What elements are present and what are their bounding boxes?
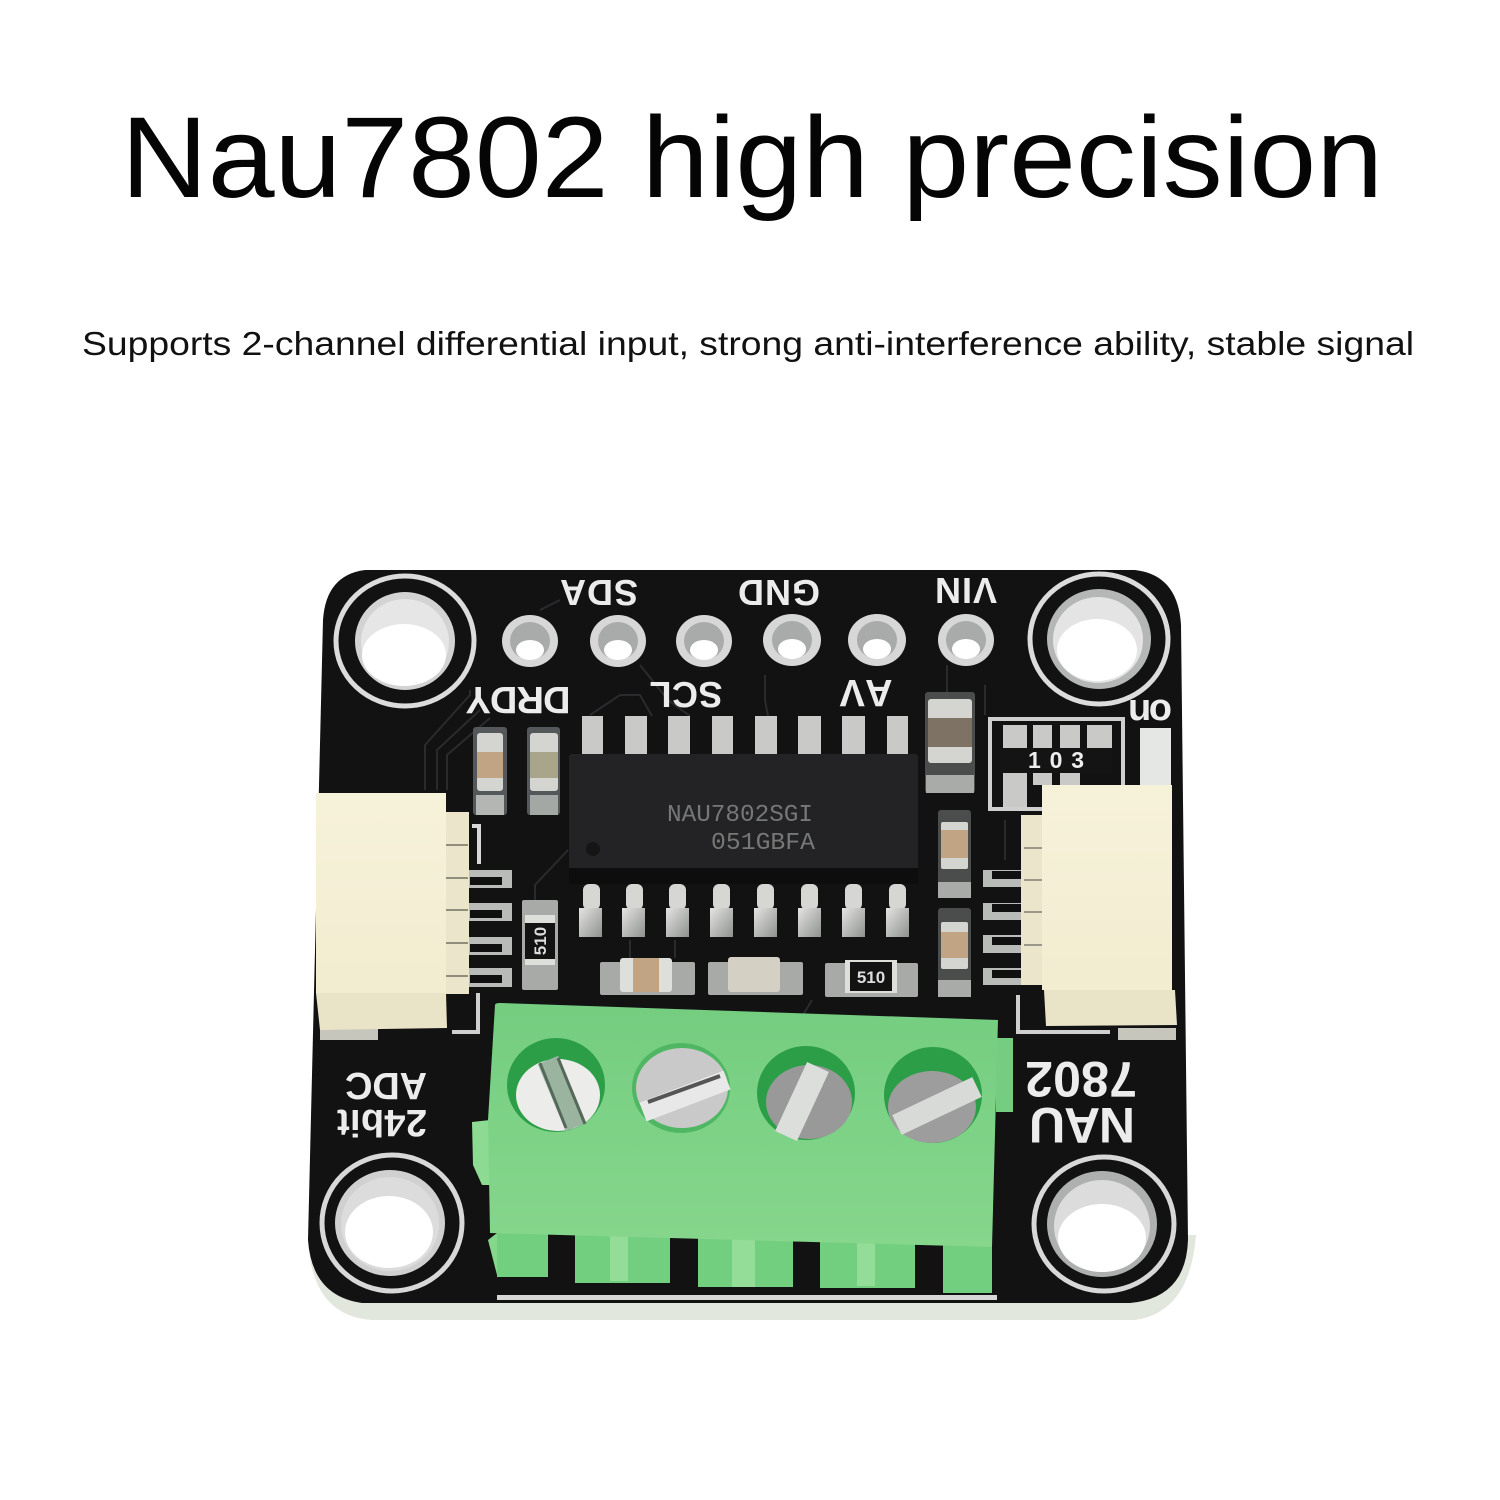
chip pins <box>579 716 909 937</box>
silkscreen labels: SDA <box>560 572 638 613</box>
left connector <box>316 793 512 1040</box>
screw 1 <box>507 1038 605 1132</box>
capacitor pair: left <box>473 727 560 815</box>
resistor array 103 <box>990 719 1123 809</box>
board edge <box>308 1235 1196 1320</box>
silkscreen labels: AV <box>839 671 892 713</box>
terminal feet <box>497 1225 992 1293</box>
silkscreen labels: ADC <box>345 1064 427 1106</box>
title: Nau7802 high precision <box>121 94 1383 222</box>
silkscreen labels: DRDY <box>466 678 570 720</box>
circuit board module <box>308 570 1196 1320</box>
capacitors: right <box>938 810 971 997</box>
capacitors: bottom <box>600 957 803 995</box>
mounting hole: top right <box>1030 574 1168 704</box>
silkscreen labels: VIN <box>935 570 997 611</box>
mounting hole: bottom left <box>322 1155 462 1291</box>
silkscreen labels: GND <box>738 572 820 613</box>
NAU7802 chip: NAU7802SGI <box>667 802 813 829</box>
right connector <box>983 785 1177 1040</box>
bottom silk line <box>497 1295 997 1300</box>
NAU7802 chip <box>569 754 918 884</box>
capacitor: large <box>925 692 975 793</box>
silkscreen labels <box>337 570 1172 1153</box>
subtitle: Supports 2-channel differential input, strong anti-interference ability, stable signal <box>82 325 1414 362</box>
terminal tabs <box>472 1120 492 1185</box>
LED <box>1140 728 1171 785</box>
screw 4 <box>884 1047 982 1143</box>
silkscreen labels: on <box>1128 691 1172 733</box>
mounting hole: top left <box>336 576 474 706</box>
PCB body <box>308 570 1188 1303</box>
mounting hole: bottom right <box>1034 1157 1174 1291</box>
screw 2 <box>632 1043 730 1133</box>
silkscreen labels: 7802 <box>1025 1051 1137 1107</box>
PCB traces <box>425 600 1005 1020</box>
small components <box>472 692 1171 997</box>
resistor array 103: 103 <box>1028 747 1084 773</box>
L silk mark <box>472 826 479 864</box>
resistor: left: 510 <box>531 927 550 955</box>
screw 3 <box>757 1046 855 1140</box>
resistor: left <box>522 900 558 990</box>
header pads <box>502 614 994 667</box>
resistor: bottom: 510 <box>857 968 885 987</box>
silkscreen labels: 24bit <box>337 1101 427 1143</box>
terminal body <box>488 1003 998 1247</box>
green terminal block <box>472 1003 1013 1293</box>
resistor: bottom <box>825 960 918 997</box>
silkscreen labels: NAU <box>1029 1097 1135 1153</box>
NAU7802 chip: 051GBFA <box>711 830 816 857</box>
silkscreen labels: SCL <box>650 674 722 715</box>
